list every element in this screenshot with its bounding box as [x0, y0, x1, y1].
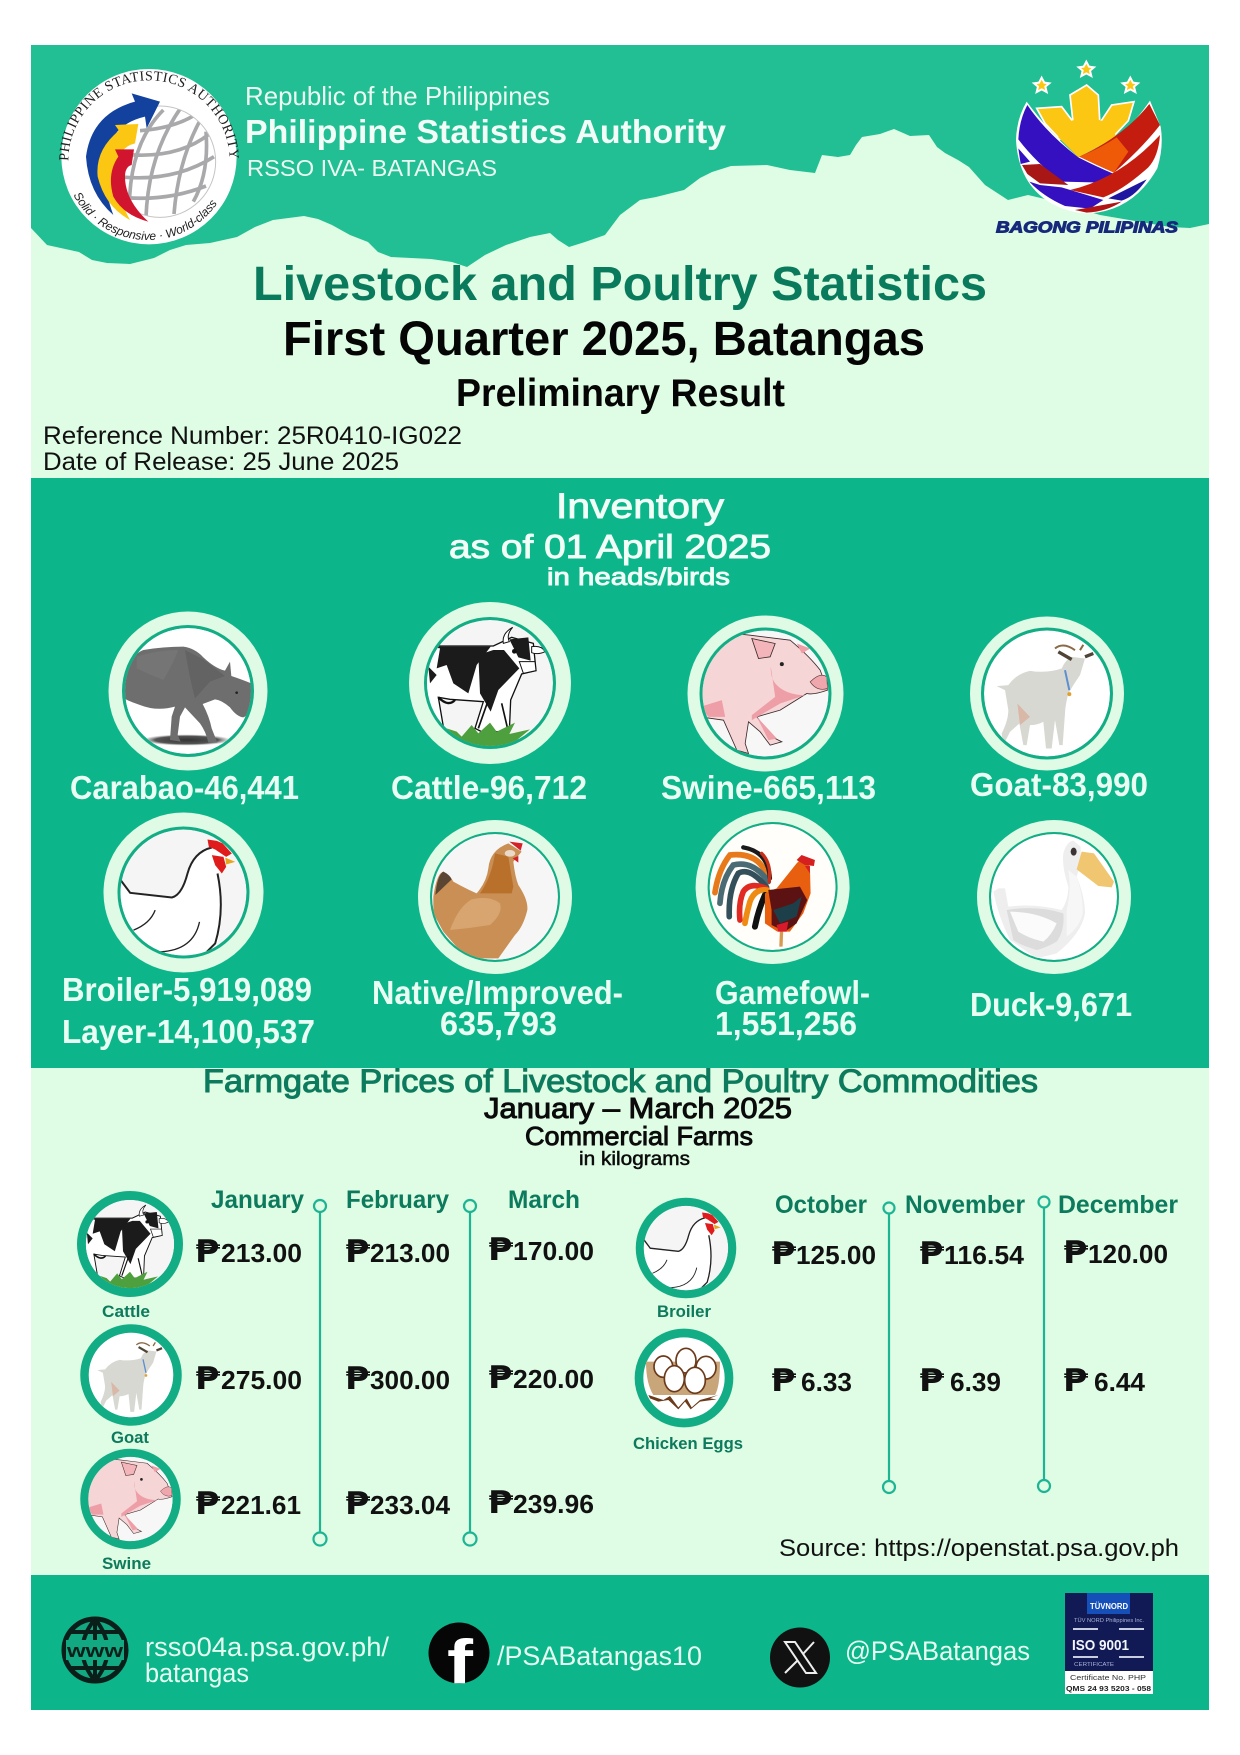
header organisation text: Philippine Statistics Authority — [245, 113, 727, 150]
icon: carabao — [108, 612, 268, 770]
icon: duck — [977, 820, 1131, 974]
label: broiler: Broiler-5,919,089 — [62, 971, 312, 1008]
prices: goat row: ₱ — [195, 1361, 220, 1397]
badge: ISO 9001: QMS 24 93 5203 - 058 — [1066, 1686, 1151, 1693]
inventory heading: Inventory — [556, 487, 725, 526]
prices: chicken eggs row: 6.33 — [801, 1367, 852, 1397]
icon: swine — [688, 616, 844, 772]
prices: broiler row: ₱ — [771, 1236, 796, 1272]
header organisation text: Republic of the Philippines — [245, 81, 550, 111]
month headers: October to December — [775, 1191, 1178, 1219]
month headers: October to December: October — [775, 1191, 867, 1219]
label: carabao: Carabao-46,441 — [70, 769, 299, 806]
inventory heading — [449, 487, 771, 591]
prices: goat row: 220.00 — [513, 1364, 594, 1394]
label: native/improved — [372, 974, 623, 1042]
prices: goat row: 300.00 — [370, 1365, 450, 1395]
logo: Bagong Pilipinas: BAGONG PILIPINAS — [996, 220, 1179, 237]
label: native/improved: Native/Improved- — [372, 974, 623, 1011]
icon: broiler — [104, 812, 264, 972]
prices: cattle row: 213.00 — [370, 1238, 450, 1268]
badge: ISO 9001 — [1065, 1593, 1153, 1694]
farmgate heading: in kilograms — [579, 1149, 690, 1170]
label: gamefowl: Gamefowl- — [715, 974, 870, 1011]
prices: broiler row: 120.00 — [1088, 1239, 1168, 1269]
icon: facebook: f — [447, 1628, 473, 1697]
column dividers — [314, 1196, 1050, 1546]
reference number and release date: Reference Number: 25R0410-IG022 — [43, 422, 462, 450]
icon: facebook — [428, 1622, 490, 1697]
icon: goat small — [84, 1328, 178, 1422]
source note: Source: https://openstat.psa.gov.ph — [779, 1535, 1179, 1562]
label: cattle small: Cattle — [102, 1302, 150, 1321]
prices: swine row: ₱ — [195, 1486, 220, 1522]
label: broiler small: Broiler — [657, 1302, 711, 1321]
farmgate heading: Farmgate Prices of Livestock and Poultry Commodities — [203, 1063, 1038, 1099]
badge: ISO 9001: ISO 9001 — [1072, 1637, 1129, 1654]
title block: Livestock and Poultry Statistics — [253, 258, 987, 311]
icon: native chicken — [418, 820, 572, 974]
icon: swine small — [84, 1453, 176, 1545]
label: gamefowl: 1,551,256 — [715, 1005, 857, 1042]
title block: First Quarter 2025, Batangas — [283, 313, 925, 366]
icon: goat — [970, 616, 1124, 770]
panel: footer — [31, 1575, 1209, 1710]
month headers: January to March: February — [346, 1186, 449, 1214]
logo: Philippine Statistics Authority seal: Solid · Responsive · World-class — [74, 192, 216, 240]
prices: chicken eggs row: 6.44 — [1094, 1367, 1146, 1397]
label: gamefowl — [715, 974, 870, 1042]
prices: cattle row: ₱ — [488, 1232, 513, 1268]
prices: goat row — [195, 1360, 594, 1397]
prices: goat row: 275.00 — [221, 1365, 302, 1395]
prices: chicken eggs row: ₱ — [919, 1363, 944, 1399]
icon: cattle small — [82, 1196, 178, 1292]
badge: ISO 9001: CERTIFICATE — [1074, 1662, 1115, 1668]
label: swine: Swine-665,113 — [661, 769, 876, 806]
badge: ISO 9001: Certificate No. PHP — [1070, 1675, 1146, 1682]
prices: swine row: 239.96 — [513, 1489, 594, 1519]
prices: broiler row: ₱ — [919, 1236, 944, 1272]
farmgate heading: January – March 2025 — [484, 1093, 792, 1125]
title block: Preliminary Result — [456, 372, 785, 415]
icon: broiler small — [640, 1202, 732, 1294]
prices: chicken eggs row: ₱ — [1063, 1363, 1088, 1399]
website text — [145, 1632, 390, 1688]
month headers: January to March: March — [508, 1186, 580, 1214]
prices: swine row: 233.04 — [370, 1490, 451, 1520]
logo: Bagong Pilipinas — [996, 62, 1179, 237]
logo: Philippine Statistics Authority seal — [59, 69, 239, 244]
prices: cattle row: ₱ — [345, 1234, 370, 1270]
month headers: January to March: January — [211, 1186, 304, 1214]
label: goat small: Goat — [111, 1428, 149, 1447]
label: chicken eggs: Chicken Eggs — [633, 1434, 743, 1453]
icon: gamefowl — [696, 810, 850, 964]
panel: farmgate prices — [82, 1063, 1179, 1573]
logo: Philippine Statistics Authority seal: PHILIPPINE STATISTICS AUTHORITY — [59, 71, 239, 160]
prices: chicken eggs row — [771, 1363, 1146, 1399]
month headers: October to December: December — [1058, 1191, 1178, 1219]
prices: chicken eggs row: 6.39 — [950, 1367, 1001, 1397]
prices: broiler row: 125.00 — [796, 1240, 876, 1270]
farmgate heading — [203, 1063, 1038, 1170]
prices: swine row — [195, 1485, 594, 1522]
icon: chicken eggs — [639, 1333, 729, 1423]
prices: cattle row: 213.00 — [221, 1238, 302, 1268]
label: goat: Goat-83,990 — [970, 766, 1148, 803]
prices: chicken eggs row: ₱ — [771, 1363, 796, 1399]
prices: goat row: ₱ — [345, 1361, 370, 1397]
sun — [1037, 85, 1134, 139]
month headers: January to March — [211, 1186, 580, 1214]
X handle: @PSABatangas — [845, 1636, 1030, 1666]
label: layer: Layer-14,100,537 — [62, 1013, 315, 1050]
facebook handle: /PSABatangas10 — [497, 1641, 702, 1671]
label: duck: Duck-9,671 — [970, 986, 1132, 1023]
stars — [1034, 62, 1138, 92]
prices: swine row: 221.61 — [221, 1490, 301, 1520]
farmgate heading: Commercial Farms — [525, 1121, 753, 1151]
panel: inventory — [31, 478, 1209, 1068]
reference number and release date: Date of Release: 25 June 2025 — [43, 448, 399, 476]
prices: broiler row: 116.54 — [944, 1240, 1025, 1270]
prices: broiler row — [771, 1235, 1168, 1272]
icon: website globe — [64, 1619, 126, 1681]
prices: goat row: ₱ — [488, 1360, 513, 1396]
badge: ISO 9001: TÜV NORD Philippines Inc. — [1074, 1617, 1144, 1624]
icon: cattle — [409, 602, 571, 764]
label: swine small: Swine — [102, 1554, 151, 1573]
badge: ISO 9001: TÜVNORD — [1090, 1602, 1128, 1611]
prices: swine row: ₱ — [345, 1486, 370, 1522]
label: cattle: Cattle-96,712 — [391, 769, 587, 806]
title block — [253, 258, 987, 415]
prices: broiler row: ₱ — [1063, 1235, 1088, 1271]
header organisation text — [245, 81, 727, 181]
website text: batangas — [145, 1658, 249, 1688]
prices: cattle row: 170.00 — [513, 1236, 594, 1266]
prices: swine row: ₱ — [488, 1485, 513, 1521]
inventory heading: as of 01 April 2025 — [449, 528, 771, 565]
prices: cattle row — [195, 1232, 594, 1270]
icon: X — [770, 1628, 830, 1688]
panel: header band — [31, 45, 1209, 300]
month headers: October to December: November — [905, 1191, 1025, 1219]
white backing — [1016, 101, 1162, 213]
label: native/improved: 635,793 — [440, 1005, 557, 1042]
header organisation text: RSSO IVA- BATANGAS — [247, 155, 497, 181]
website text: rsso04a.psa.gov.ph/ — [145, 1632, 390, 1662]
inventory heading: in heads/birds — [547, 564, 730, 591]
prices: cattle row: ₱ — [195, 1234, 220, 1270]
icon: website globe: www — [66, 1641, 124, 1661]
bands — [1018, 105, 1114, 183]
reference number and release date — [43, 422, 462, 476]
